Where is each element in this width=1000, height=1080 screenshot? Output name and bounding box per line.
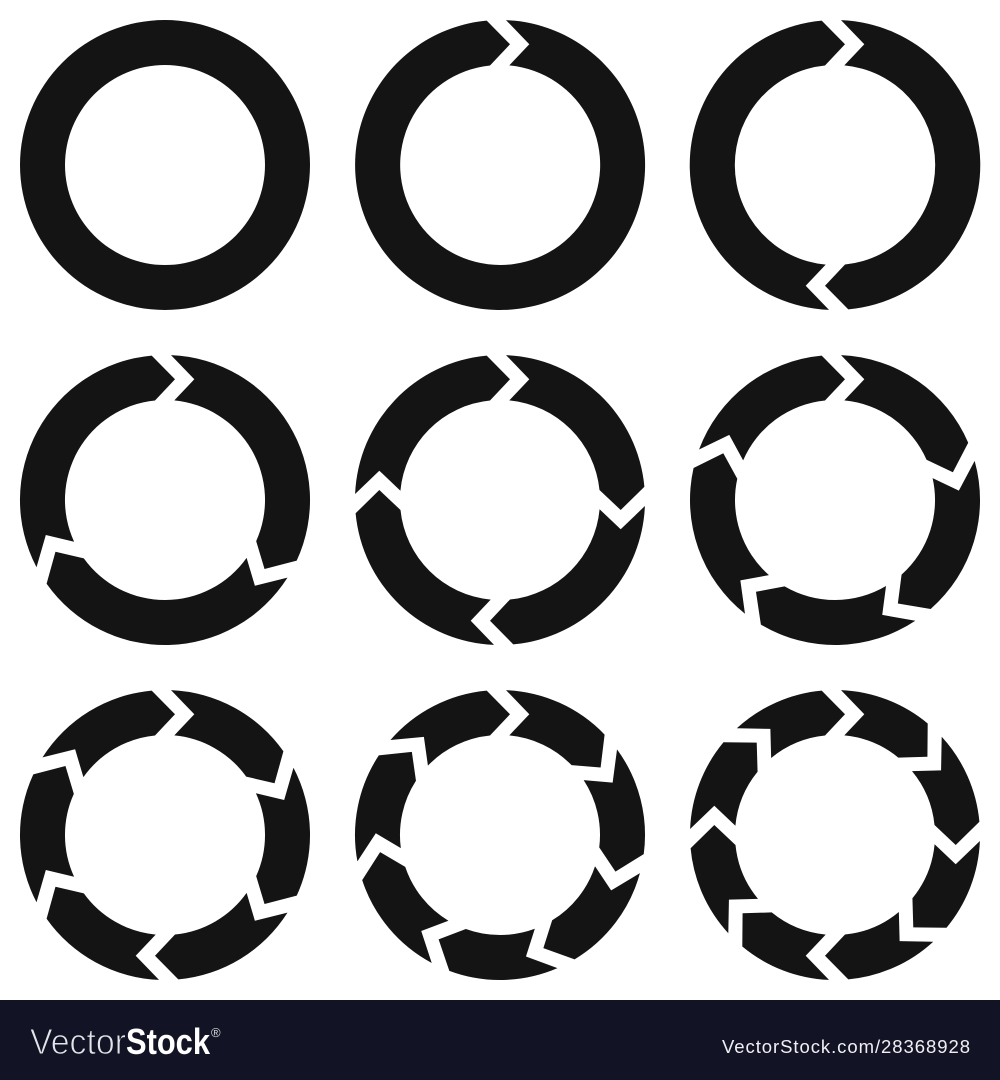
arrow 4 of 8	[824, 894, 933, 1003]
arrow 2 of 8	[894, 737, 1000, 846]
arrow 2 of 4	[490, 506, 645, 644]
arrow 3 of 7	[542, 856, 640, 969]
ring: five arrows	[642, 329, 1000, 696]
arrow 5 of 6	[0, 758, 117, 902]
arrow 3 of 8	[912, 841, 980, 928]
arrow 1 of 5	[841, 355, 968, 472]
arrow 3 of 6	[151, 866, 287, 1010]
arrow 4 of 6	[47, 887, 159, 980]
arrow 8 of 8	[737, 667, 846, 776]
ring: three arrows	[0, 340, 310, 698]
arrow 2 of 5	[863, 461, 1000, 618]
ring: one arrow	[355, 20, 645, 310]
ring: two arrows	[690, 20, 980, 310]
arrow 3 of 4	[356, 490, 494, 645]
brand wordmark: Stock	[126, 1021, 211, 1062]
arrow 6 of 7	[335, 748, 433, 861]
ring: seven arrows	[335, 663, 679, 1011]
arrow 5 of 5	[699, 329, 850, 486]
arrow 2 of 6	[213, 768, 350, 912]
arrow 2 of 2	[690, 21, 845, 310]
arrow 6 of 8	[667, 824, 776, 933]
ring: solid, no arrows	[20, 20, 310, 310]
arrow 1 of 8	[841, 690, 928, 758]
arrow 5 of 7	[343, 850, 465, 963]
arrow 4 of 5	[642, 444, 814, 614]
arrow 1 of 7	[506, 690, 605, 768]
arrow 2 of 3	[33, 471, 287, 698]
arrow 7 of 8	[690, 742, 758, 829]
brand wordmark: Vector	[30, 1021, 126, 1062]
arrow 1 of 3	[171, 355, 310, 569]
arrow 1 of 4	[506, 355, 644, 510]
ring: six arrows	[0, 660, 350, 1010]
arrow 3 of 5	[744, 526, 915, 696]
arrow 4 of 4	[355, 356, 510, 494]
ring: four arrows	[355, 355, 645, 645]
arrow 7 of 7	[390, 663, 512, 788]
arrow 1 of 6	[171, 690, 283, 783]
brand wordmark	[30, 1021, 221, 1062]
arrow 4 of 7	[435, 898, 557, 1011]
arrow 1 of 2	[825, 20, 980, 309]
arrow 6 of 6	[43, 660, 179, 804]
arrow 1 of 1	[355, 20, 645, 310]
arrow 5 of 8	[742, 912, 829, 980]
arrow 3 of 3	[0, 340, 222, 567]
arrow 2 of 7	[556, 749, 679, 875]
ring: eight arrows	[667, 667, 1000, 1003]
footer background	[0, 1000, 1000, 1080]
footer bar	[0, 1000, 1000, 1080]
image id url: VectorStock.com/28368928	[722, 1036, 970, 1057]
brand wordmark: ®	[211, 1025, 221, 1040]
